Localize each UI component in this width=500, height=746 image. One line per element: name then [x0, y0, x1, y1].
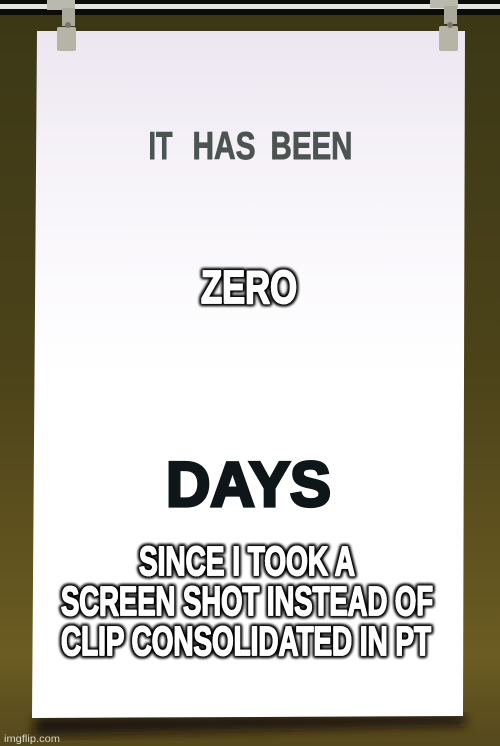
watermark: imgflip.com — [4, 734, 60, 745]
caption: since I took a screen shot instead of clip consolidated in PT: SINCE I TOOK A — [139, 538, 355, 584]
heading: it has been: IT — [148, 125, 173, 168]
caption: since I took a screen shot instead of clip consolidated in PT — [61, 538, 433, 664]
heading: it has been: HAS — [192, 125, 256, 168]
clip: left — [47, 0, 76, 51]
heading: it has been — [148, 125, 352, 168]
clip: right — [430, 0, 458, 51]
caption: zero: ZERO — [201, 261, 297, 313]
heading: it has been: BEEN — [270, 125, 352, 168]
heading: days: DAYS — [166, 450, 331, 520]
poster sheet — [32, 31, 465, 718]
poster shadow — [32, 714, 466, 736]
hanging rail — [0, 0, 500, 15]
